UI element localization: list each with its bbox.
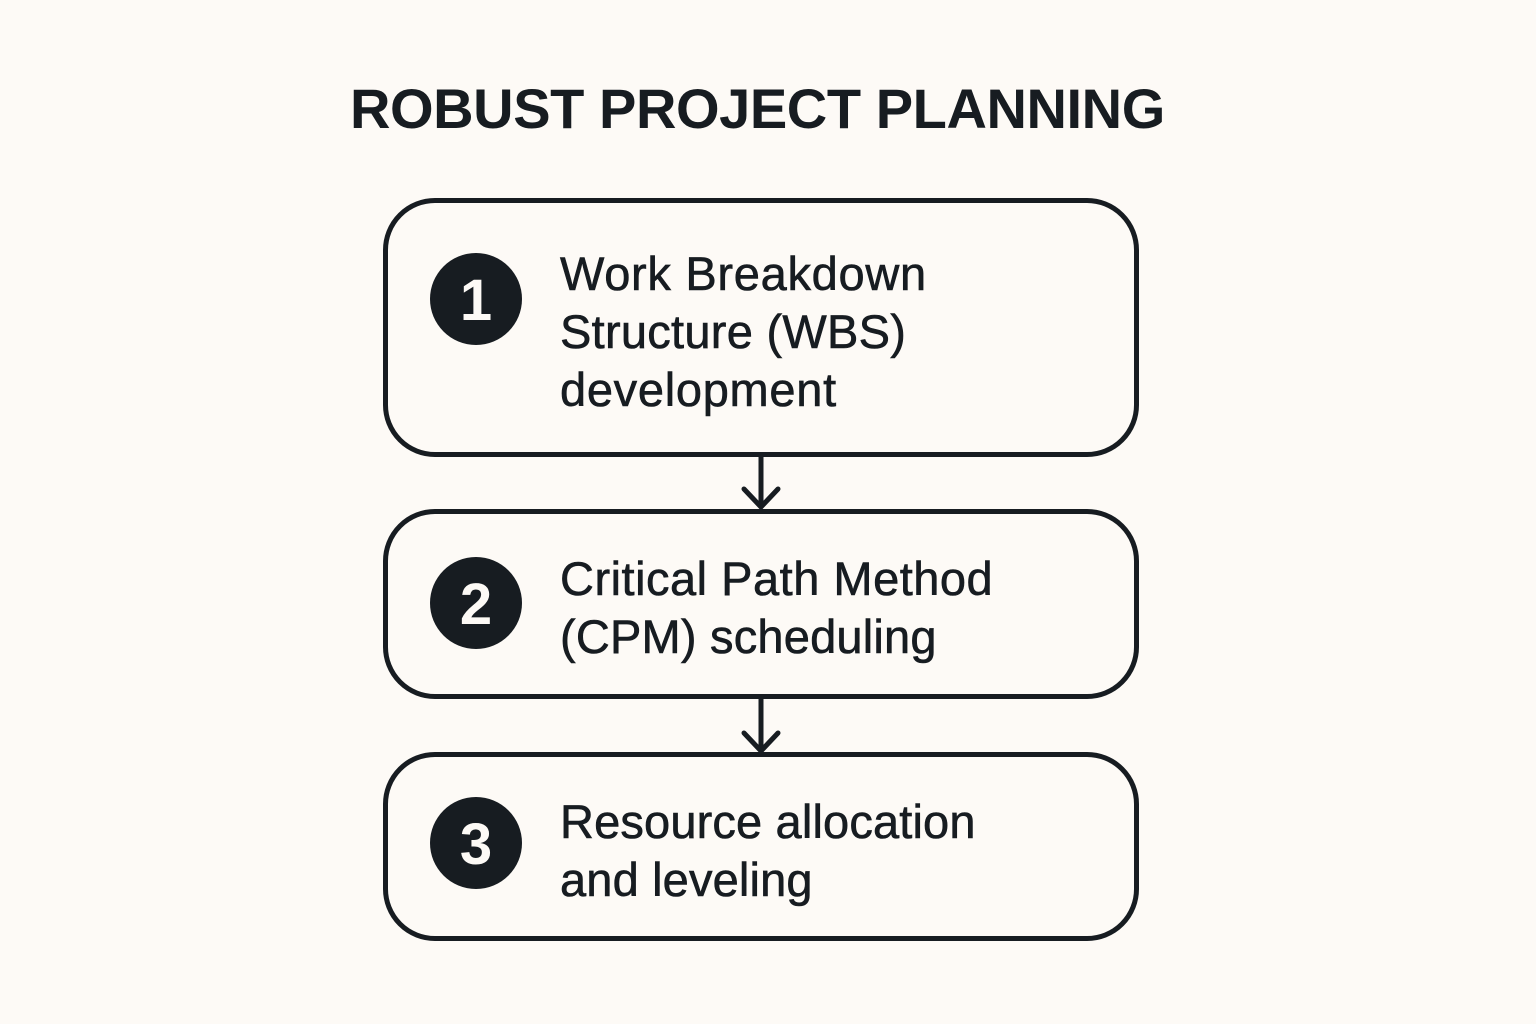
panel: step 3 box <box>383 752 1139 941</box>
text: step 2 label <box>560 552 993 664</box>
text: step 3 label <box>560 795 976 906</box>
icon: step 2 number: 2 <box>460 572 492 637</box>
panel: step 2 box <box>383 509 1139 699</box>
text: step 3 label: and leveling <box>560 853 813 906</box>
icon: step 3 number <box>430 797 522 889</box>
icon: step 2 number <box>430 557 522 649</box>
arrow: step 2 to step 3 <box>742 699 780 752</box>
text: step 1 label: Structure (WBS) <box>560 305 906 358</box>
text: step 2 label: (CPM) scheduling <box>560 610 937 663</box>
icon: step 3 number: 3 <box>460 812 492 877</box>
title: ROBUST PROJECT PLANNING <box>350 77 1165 140</box>
text: step 1 label: Work Breakdown <box>560 247 927 300</box>
text: step 2 label: Critical Path Method <box>560 552 993 605</box>
text: step 1 label: development <box>560 363 837 416</box>
panel: step 1 box <box>383 198 1139 457</box>
icon: step 1 number: 1 <box>460 268 492 333</box>
text: step 1 label <box>560 247 927 416</box>
text: step 3 label: Resource allocation <box>560 795 976 848</box>
arrow: step 1 to step 2 <box>742 457 780 509</box>
icon: step 1 number <box>430 253 522 345</box>
